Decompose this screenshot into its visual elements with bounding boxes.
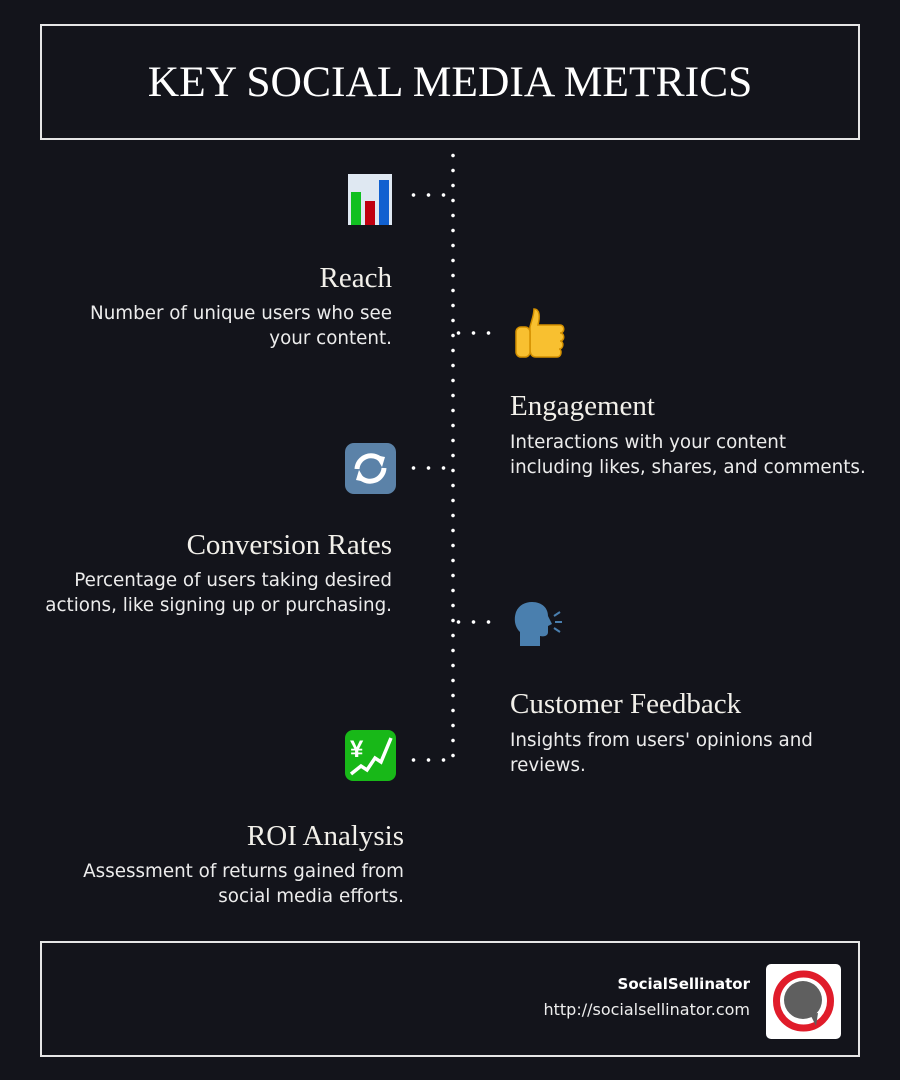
block: conversion rates: Conversion Rates xyxy=(187,529,392,561)
footer brand text: SocialSellinator xyxy=(618,975,750,993)
icon: refresh arrows xyxy=(345,443,396,494)
block: conversion rates xyxy=(45,529,392,616)
block: roi analysis: ROI Analysis xyxy=(247,820,404,852)
block: conversion rates: Percentage of users taking desired xyxy=(74,570,392,591)
block: customer feedback: Customer Feedback xyxy=(510,688,741,720)
connector: conversion xyxy=(406,466,456,470)
logo xyxy=(766,964,841,1039)
icon: bar chart xyxy=(348,174,392,225)
block: roi analysis xyxy=(83,820,404,907)
title box xyxy=(40,24,860,140)
block: roi analysis: Assessment of returns gained from xyxy=(83,861,404,882)
block: reach: your content. xyxy=(269,328,392,349)
block: reach: Number of unique users who see xyxy=(90,303,392,324)
title box: KEY SOCIAL MEDIA METRICS xyxy=(148,58,752,106)
icon: yen chart: ¥ xyxy=(350,736,364,763)
footer brand text: http://socialsellinator.com xyxy=(543,1000,750,1019)
icon: yen chart xyxy=(345,730,396,781)
footer brand text xyxy=(543,975,750,1019)
block: engagement: Engagement xyxy=(510,390,655,422)
icon: speaking head xyxy=(514,602,562,646)
block: customer feedback: Insights from users' opinions and xyxy=(510,730,813,751)
connector: feedback xyxy=(451,620,501,624)
timeline dotted line xyxy=(451,148,455,764)
footer box xyxy=(40,941,860,1057)
block: customer feedback xyxy=(510,688,813,776)
block: customer feedback: reviews. xyxy=(510,755,586,776)
block: engagement: Interactions with your content xyxy=(510,432,786,453)
block: engagement xyxy=(510,390,866,478)
block: roi analysis: social media efforts. xyxy=(218,886,404,907)
connector: reach xyxy=(406,193,456,197)
connector: roi xyxy=(406,758,456,762)
block: reach: Reach xyxy=(320,262,392,294)
block: engagement: including likes, shares, and comments. xyxy=(510,457,866,478)
connector: engagement xyxy=(451,331,501,335)
icon: thumbs up xyxy=(515,308,564,358)
block: conversion rates: actions, like signing up or purchasing. xyxy=(45,595,392,616)
block: reach xyxy=(90,262,392,349)
